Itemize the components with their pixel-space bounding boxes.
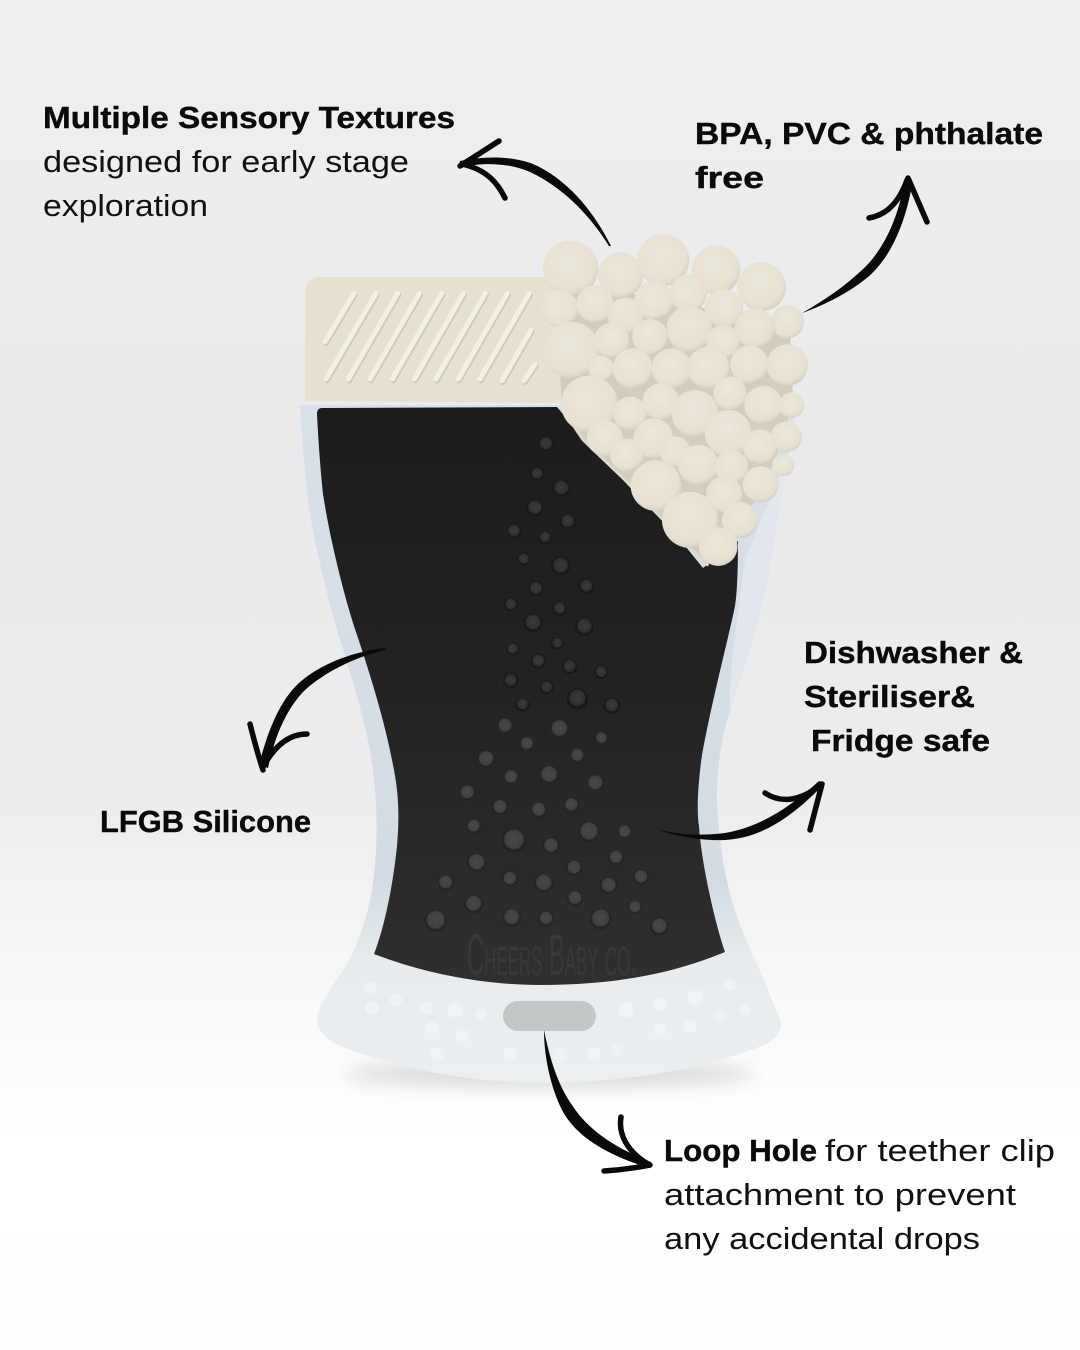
text: multiple sensory textures [43, 100, 455, 223]
base shadow [345, 1061, 755, 1087]
arrow: to dishwasher safe [656, 781, 825, 840]
clear glass body [300, 405, 795, 1083]
arrow: to BPA free [802, 178, 927, 313]
pale upper-right glass highlight [730, 450, 790, 710]
text: dishwasher safe: Fridge safe [811, 723, 990, 758]
text: BPA free: BPA, PVC & phthalate [695, 116, 1043, 151]
illustration: pint glass teether: Cheers Baby co. [467, 923, 637, 988]
translucent base dots [364, 979, 751, 1063]
text: dishwasher safe [804, 635, 1023, 758]
diagonal ridges [325, 293, 536, 382]
bubble texture dots upper [503, 436, 620, 714]
cream cap [305, 277, 575, 403]
text: dishwasher safe: Steriliser& [804, 679, 975, 714]
text: loop hole [664, 1133, 1055, 1256]
text: loop hole: for teether clip [825, 1133, 1055, 1168]
text: loop hole: attachment to prevent [664, 1177, 1016, 1212]
dark liquid panel [317, 407, 738, 985]
text: multiple sensory textures: exploration [43, 188, 208, 223]
arrow: to LFGB silicone [250, 648, 385, 770]
text: LFGB silicone: LFGB Silicone [100, 804, 311, 839]
text: loop hole: any accidental drops [664, 1221, 980, 1256]
text: BPA free [695, 116, 1043, 195]
text: dishwasher safe: Dishwasher & [804, 635, 1023, 670]
text: multiple sensory textures: Multiple Sensory Textures [43, 100, 455, 135]
foam bubbles [541, 234, 808, 566]
bubble texture dots lower [424, 718, 669, 936]
loop hole [503, 1001, 596, 1031]
arrow: to sensory textures [458, 141, 611, 246]
text: multiple sensory textures: designed for early stage [43, 144, 409, 179]
arrow: to loop hole [544, 1030, 651, 1171]
text: BPA free: free [695, 160, 764, 195]
text: loop hole: Loop Hole [664, 1133, 817, 1168]
illustration: pint glass teether [300, 234, 808, 1087]
